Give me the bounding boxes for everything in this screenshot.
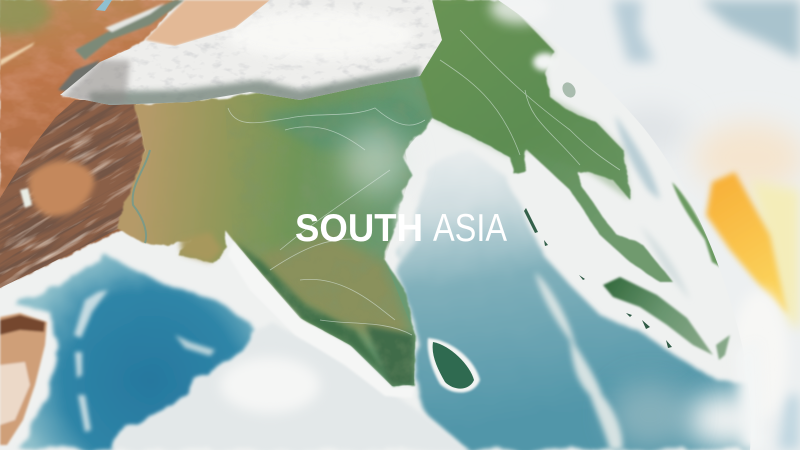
Central Asia and Iran — [0, 0, 180, 288]
SOUTH: SOUTH — [295, 207, 423, 250]
limb haze — [615, 115, 660, 200]
darker south India — [234, 97, 468, 386]
southern tip — [365, 325, 414, 386]
Mentawai islands — [579, 275, 672, 348]
Indus river — [133, 150, 150, 243]
bottom cloud mass — [113, 325, 468, 450]
Taklamakan desert — [145, 0, 272, 46]
Ganges blue-green plain — [260, 95, 430, 150]
yellow haze beside sun — [750, 180, 800, 330]
Andaman islands — [524, 208, 548, 246]
cloud streak in bay — [535, 272, 623, 450]
mist over Ganges delta — [343, 126, 407, 194]
white coast west India — [228, 242, 414, 398]
grey cloud shading — [612, 108, 688, 152]
Tonle lake — [560, 80, 578, 100]
orange sun band — [706, 172, 788, 315]
terrain mottling — [267, 104, 468, 376]
wisp lower — [78, 395, 91, 432]
cloud veil across the limb — [490, 0, 765, 450]
Sumatra — [603, 277, 713, 355]
Helmand basin — [29, 161, 95, 216]
Arabia — [0, 313, 47, 445]
fog at lower right of bay — [685, 392, 775, 448]
bright fog below sun — [732, 290, 788, 420]
pale streak — [0, 42, 35, 66]
terrain mottling on Iran — [0, 0, 166, 196]
limb haze lower — [644, 232, 687, 294]
Sri Lanka — [428, 338, 480, 393]
central India tones — [255, 235, 412, 340]
Arabian Sea — [15, 255, 257, 450]
mist along bay coast — [395, 190, 418, 265]
rivers — [228, 30, 620, 335]
SE Asia mottling — [420, 0, 630, 200]
Hindu Kush striped mountains — [0, 100, 145, 288]
light salt pan — [20, 188, 32, 208]
ASIA: ASIA — [433, 207, 507, 250]
wisp middle — [75, 352, 82, 378]
peach sun halo — [695, 123, 800, 193]
Southeast Asia — [420, 0, 673, 282]
western ghats — [234, 242, 386, 380]
Bay of Bengal — [392, 150, 755, 450]
small cloud on coast — [533, 53, 557, 71]
Tibet snow — [50, 0, 450, 110]
cloud wisps in Arabian Sea — [74, 290, 108, 432]
west snow grey — [60, 60, 130, 105]
grey haze over bay — [610, 381, 690, 449]
Sri Lanka land — [433, 342, 474, 389]
wisp upper — [74, 290, 108, 338]
title: SOUTH ASIA — [295, 207, 507, 250]
Gujarat tan — [180, 232, 222, 262]
Pamir ridge — [58, 60, 100, 92]
green tinge top-left — [0, 0, 51, 34]
Tian Shan snow — [105, 3, 165, 32]
lake — [96, 0, 112, 11]
blue sky patches — [612, 0, 800, 450]
Malay strip — [672, 182, 722, 268]
Indian subcontinent — [117, 60, 520, 386]
white cloud base around coasts — [622, 112, 660, 152]
Tian Shan ridge — [75, 0, 185, 60]
bright cloud tops — [220, 357, 320, 413]
bright snow — [225, 10, 415, 60]
Java piece — [716, 335, 730, 360]
wisp right — [175, 335, 215, 356]
snow shadow band — [90, 66, 420, 108]
Arabia pale interior — [0, 362, 30, 425]
Oman ridge — [0, 315, 45, 335]
Sri Lanka halo — [428, 338, 480, 393]
